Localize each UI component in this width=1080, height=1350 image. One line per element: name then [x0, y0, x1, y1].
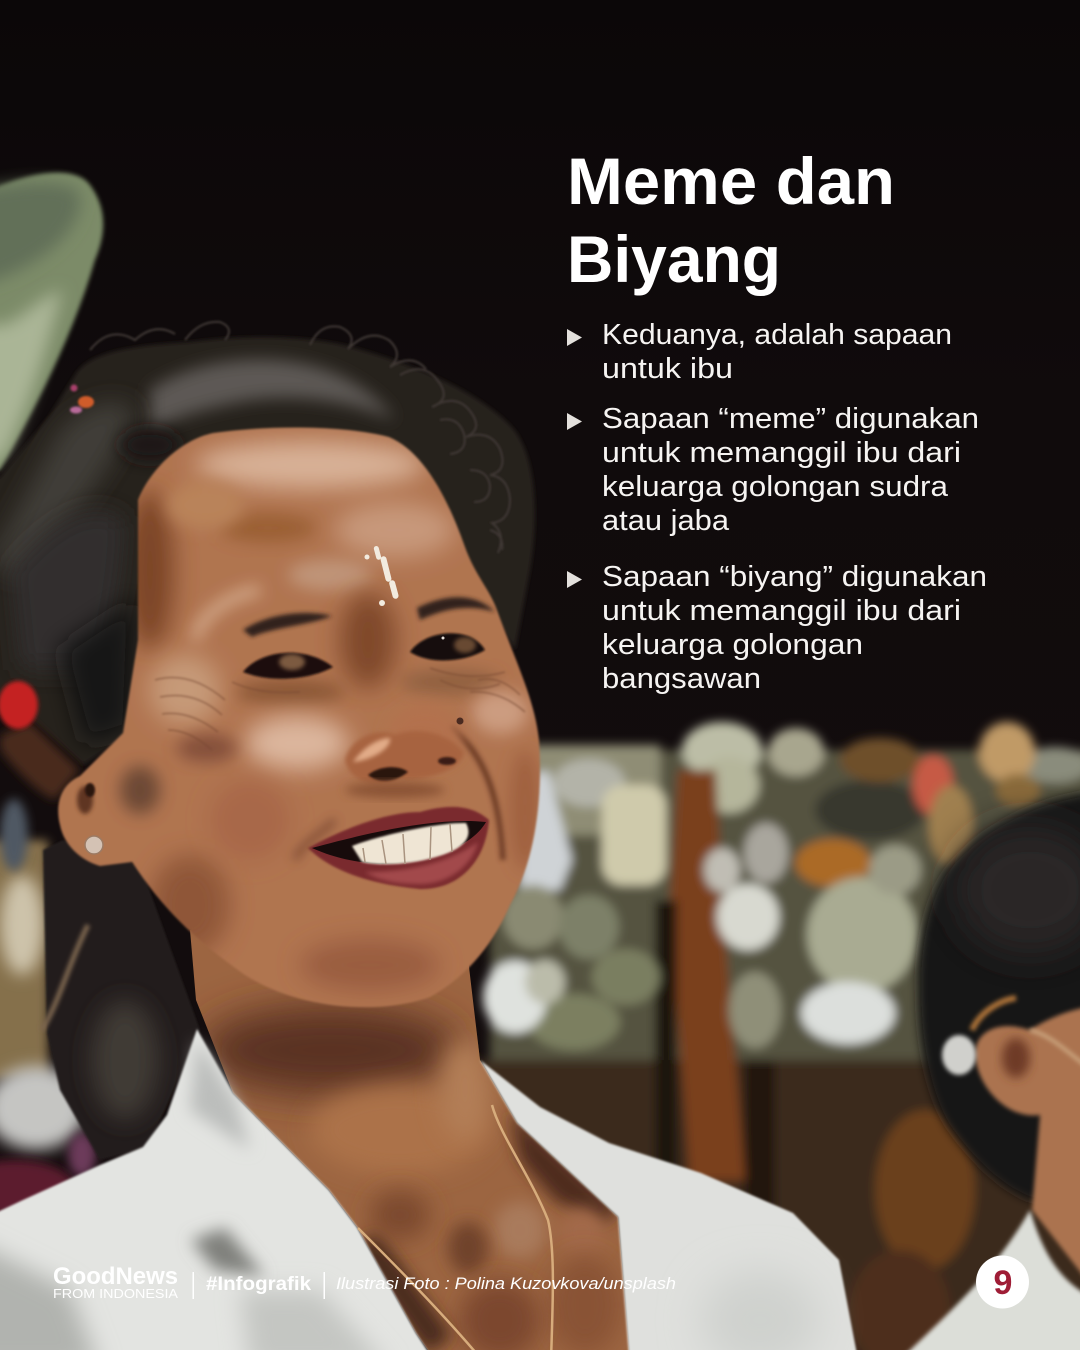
- eyes: [243, 633, 485, 679]
- brown patch behind ear: [0, 722, 80, 800]
- forehead light: [195, 441, 425, 489]
- face: [50, 420, 550, 1020]
- photo credit: Ilustrasi Foto : Polina Kuzovkova/unsplash: [336, 1274, 676, 1293]
- second woman in background: [895, 790, 1080, 1350]
- hashtag: #Infografik: [206, 1274, 311, 1295]
- title: Biyang: [567, 222, 781, 296]
- logo: GoodNews from Indonesia: GoodNews: [53, 1263, 178, 1290]
- bullet item 2: untuk memanggil ibu dari: [602, 437, 961, 469]
- hair mass: [0, 337, 535, 765]
- page number badge: 9: [994, 1264, 1012, 1302]
- wrinkles: [154, 668, 526, 740]
- eyebrows: [243, 597, 495, 637]
- page number badge: [976, 1256, 1029, 1308]
- bullet item 3: keluarga golongan: [602, 629, 863, 661]
- left foreground blur: [0, 799, 103, 1216]
- red flower: [0, 681, 38, 729]
- wooden pillar: [670, 770, 745, 1180]
- bullet item 3: [567, 561, 987, 695]
- tilaka rice marks: [364, 545, 399, 606]
- bullet item 1: [567, 319, 952, 385]
- bullet item 1: Keduanya, adalah sapaan: [602, 319, 952, 351]
- grey streaks on top of the hair: [150, 359, 395, 430]
- earring: [85, 836, 103, 854]
- lower hair behind neck: [43, 840, 200, 1160]
- bullet item 2: [567, 403, 979, 537]
- nose: [345, 705, 464, 798]
- bullet item 3: bangsawan: [602, 663, 761, 695]
- logo: GoodNews from Indonesia: FROM INDONESIA: [53, 1287, 179, 1301]
- eye socket shadow: [340, 592, 396, 688]
- cheek shadows: [177, 734, 237, 762]
- bullet item 3: untuk memanggil ibu dari: [602, 595, 961, 627]
- hair: [0, 322, 535, 1160]
- brow bone highlight: [195, 590, 260, 640]
- bullet item 2: keluarga golongan sudra: [602, 471, 949, 503]
- curly flyaway strands: [90, 322, 510, 553]
- footer: [53, 1263, 676, 1301]
- ear with earring: [77, 783, 103, 854]
- title: Meme dan: [567, 144, 895, 218]
- neck and chest: [190, 930, 629, 1350]
- bullet item 2: Sapaan “meme” digunakan: [602, 403, 979, 435]
- white blouse: [0, 1029, 860, 1350]
- bullet item 1: untuk ibu: [602, 353, 733, 385]
- bullet item 3: Sapaan “biyang” digunakan: [602, 561, 987, 593]
- blurred market bokeh: [470, 722, 1080, 1350]
- woman portrait: [0, 322, 860, 1350]
- gold necklace: [358, 1105, 553, 1350]
- forehead shadow band: [220, 513, 316, 543]
- bullet item 2: atau jaba: [602, 505, 730, 537]
- blouse left side: [0, 1029, 440, 1350]
- leaf: [0, 173, 103, 470]
- title: [567, 144, 895, 296]
- bullet list: [567, 319, 987, 695]
- cheek lights: [245, 716, 349, 770]
- hair ornament: [70, 384, 94, 414]
- smile: [308, 807, 489, 889]
- blouse right side: [480, 1060, 860, 1350]
